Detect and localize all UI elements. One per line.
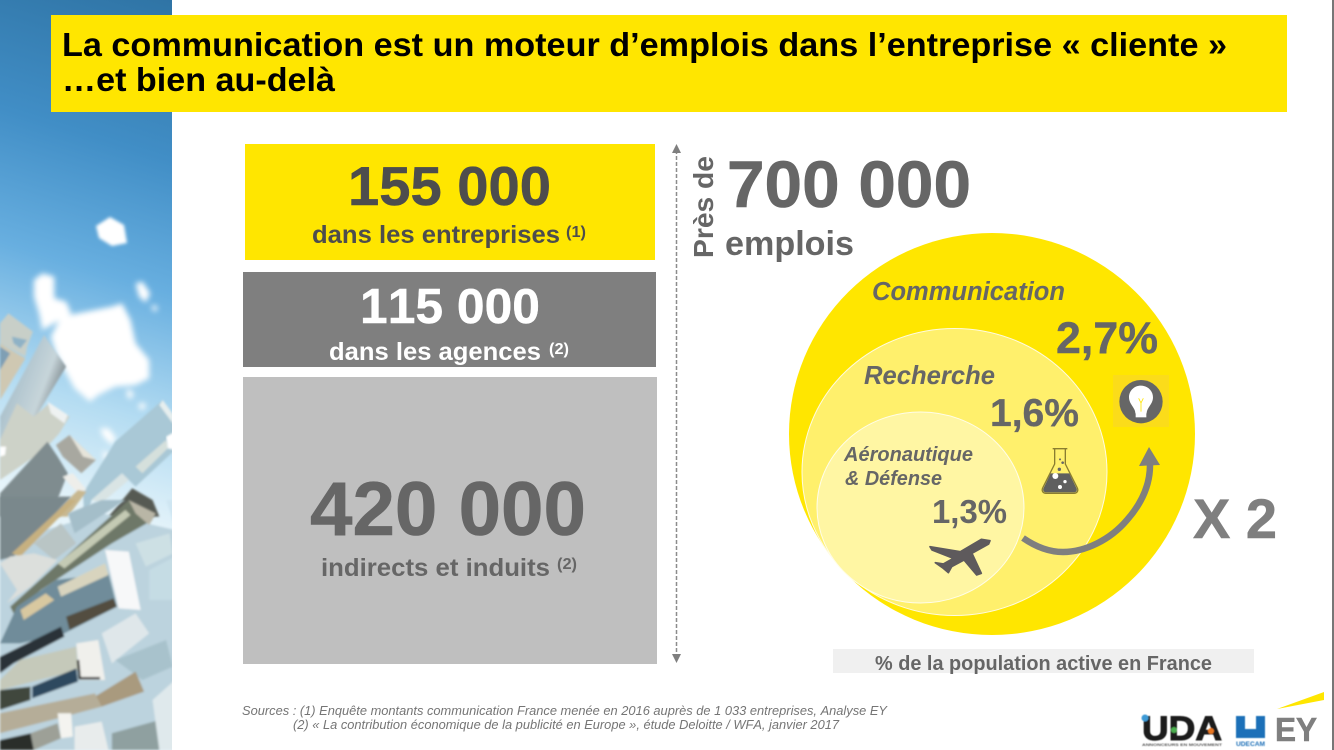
logo: UDA: ANNONCEURS EN MOUVEMENT [1142,742,1223,747]
panel: 155 000 in companies [245,144,655,260]
logo: EY: EY [1275,711,1317,748]
label: aéronautique et défense: & Défense [845,468,942,490]
label: aéronautique et défense: Aéronautique [843,444,973,466]
sources: Sources : (1) Enquête montants communication France menée en 2016 auprès de 1 033 entreprises, Analyse EY [242,703,888,718]
chart caption [833,649,1254,675]
chart: nested circles [789,233,1195,635]
label: communication: Communication [872,278,1065,306]
icon: airplane [930,539,990,575]
panel: photo sidebar of sky and towers [0,0,175,750]
panel: 420 000 indirect and induced: 420 000 [310,467,586,552]
panel: 115 000 in agencies: 115 000 [360,280,540,334]
panel: 420 000 indirect and induced: (2) [557,556,577,573]
total: près de 700 000 emplois: 700 000 [727,147,971,221]
logo: UDECAM [1236,716,1265,748]
circle: communication [789,233,1195,635]
value: 2,7%: 2,7% [1056,314,1158,363]
arrow: curved growth arrow [1023,447,1160,552]
circle: recherche [802,328,1107,616]
value: 1,6%: 1,6% [990,392,1079,435]
circle: aéronautique et défense [817,412,1024,603]
panel: 115 000 in agencies [243,272,656,367]
title banner [51,15,1287,112]
icon: flask [1042,449,1078,493]
clouds and upper towers [0,273,175,527]
total: près de 700 000 emplois: Près de [688,156,719,258]
panel: 115 000 in agencies: dans les agences [329,338,541,366]
small cloud above [96,217,127,246]
total: près de 700 000 emplois: emplois [725,225,854,263]
panel: 420 000 indirect and induced [243,377,657,664]
panel: 155 000 in companies: (1) [566,224,586,241]
label: aéronautique et défense [843,444,973,490]
panel: 155 000 in companies: dans les entreprises [312,221,560,249]
panel: 155 000 in companies: 155 000 [348,155,551,217]
chart caption: % de la population active en France [875,653,1212,675]
panel: 115 000 in agencies: (2) [549,341,569,358]
total: près de 700 000 emplois [688,147,971,263]
title banner: La communication est un moteur d’emplois dans l’entreprise « cliente » [62,26,1227,63]
multiplier: X 2: X 2 [1193,487,1277,550]
icon background square [1113,375,1169,427]
logo: UDA: UDA [1142,710,1222,748]
arrow: vertical dashed double arrow [672,144,681,663]
icon: light bulb [1119,380,1163,423]
sources: (2) « La contribution économique de la publicité en Europe », étude Deloitte / WFA, janvier 2017 [293,717,840,732]
logo: EY [1275,692,1324,748]
sources [242,703,888,732]
label: recherche: Recherche [864,362,995,390]
panel: 420 000 indirect and induced: indirects et induits [321,554,550,582]
lower towers [0,497,175,750]
logo: UDECAM: UDECAM [1236,742,1265,748]
title banner: …et bien au-delà [62,61,336,98]
value: 1,3%: 1,3% [932,493,1007,530]
